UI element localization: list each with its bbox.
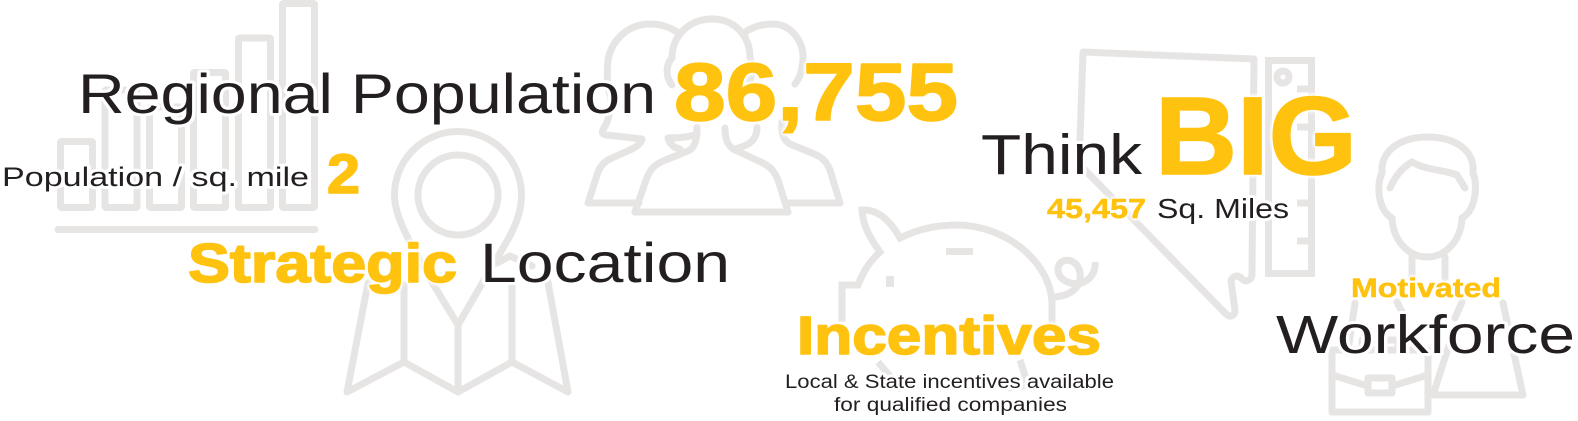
- text block: incentives description: Local & State incentives available: [785, 372, 1114, 393]
- heading: think: Think: [981, 123, 1143, 187]
- heading: regional population: Regional Population: [78, 62, 656, 125]
- icon: bar chart: [58, 4, 315, 230]
- heading: BIG: BIG: [1155, 75, 1357, 198]
- heading: motivated: Motivated: [1351, 273, 1501, 303]
- number: 2: 2: [327, 142, 360, 205]
- icon: piggy bank: [842, 210, 1095, 388]
- text block: incentives description: [785, 372, 1114, 416]
- label: population per square mile: Population / sq. mile: [2, 162, 309, 192]
- heading: strategic: Strategic: [188, 232, 457, 294]
- heading: location: Location: [480, 231, 730, 294]
- icon: business person with briefcase: [1332, 137, 1523, 412]
- heading: workforce: Workforce: [1276, 305, 1575, 365]
- text block: incentives description: for qualified companies: [834, 395, 1067, 416]
- icon: state map of Nevada: [1080, 52, 1254, 316]
- number: 86,755: 86,755: [674, 47, 958, 138]
- number: 45,457: 45,457: [1047, 193, 1146, 224]
- heading: incentives: Incentives: [797, 306, 1101, 366]
- icon: ruler: [1268, 60, 1312, 274]
- label: square miles: Sq. Miles: [1157, 193, 1289, 224]
- icon: location ribbon badge: [347, 132, 568, 392]
- icon: group of people: [588, 19, 840, 212]
